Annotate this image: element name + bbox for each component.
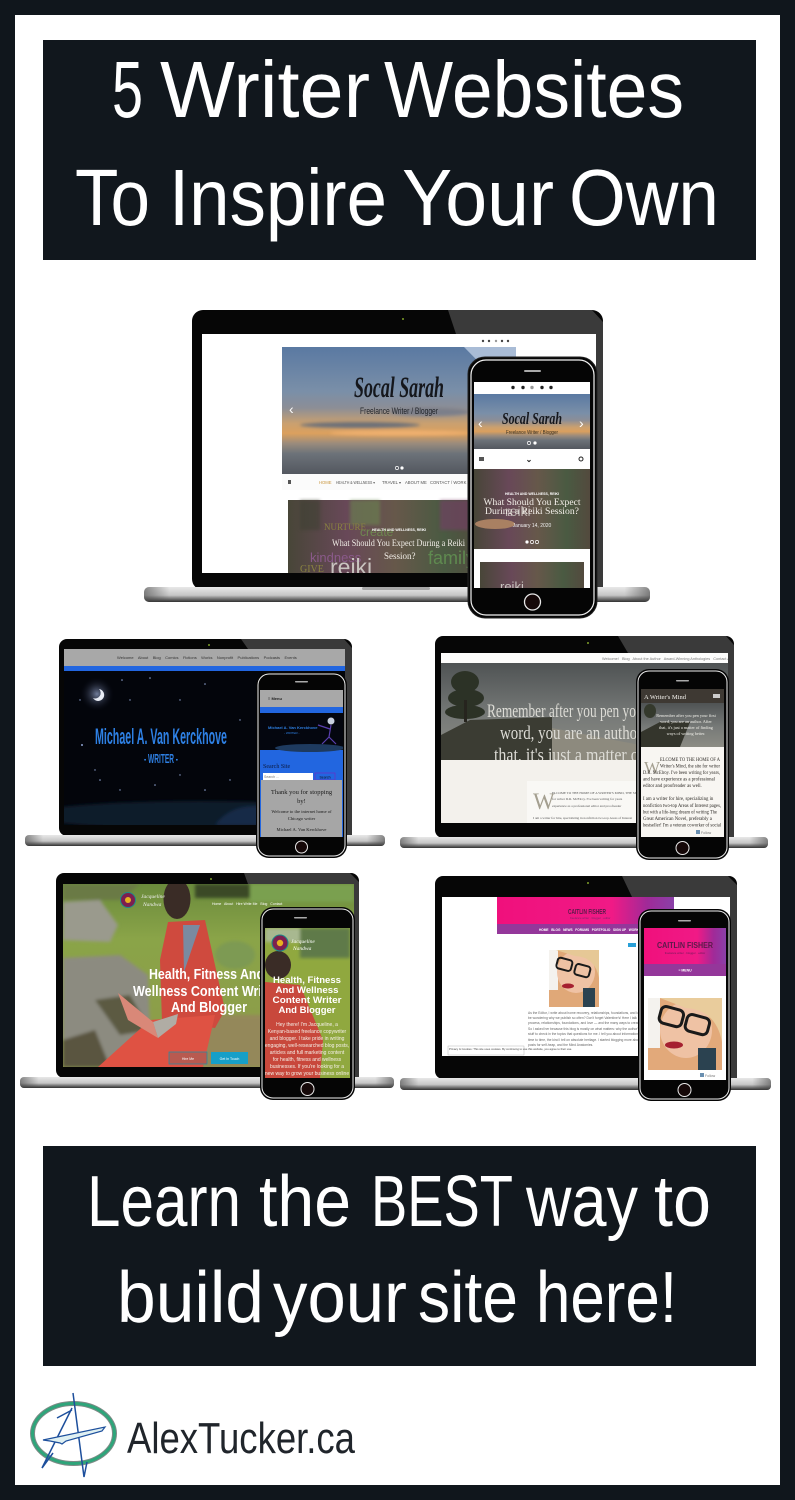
laptop: Socal Sarah: Session? — [384, 551, 416, 561]
phone: A Writer's Mind: I am a writer for hire, specializing in — [643, 797, 714, 802]
laptop: Socal Sarah: HEALTH AND WELLNESS, REIKI — [372, 528, 426, 532]
laptop: Health, Fitness and Wellness: Get In Touch — [220, 1057, 239, 1061]
title banner: Writer — [160, 45, 370, 134]
laptop: Caitlin Fisher: As the Editor, I write about home recovery, relationships, foundations, and love. You may — [528, 1011, 657, 1015]
phone: Health, Fitness and Wellness: And Blogger — [278, 1005, 336, 1015]
mockup: A Writer's Mind laptop and phone — [400, 636, 768, 860]
title banner: Websites — [384, 45, 684, 134]
phone: Socal Sarah: ‹ — [478, 415, 483, 431]
laptop: Socal Sarah — [144, 310, 650, 602]
laptop: Caitlin Fisher: be wondering why we publish so often? Don't forget Valentine's! Here I talk about recovery — [528, 1016, 660, 1020]
phone: Michael A. Van Kerckhove — [256, 672, 347, 858]
title banner — [43, 40, 756, 260]
call to action banner: BEST — [371, 1162, 513, 1242]
phone: Michael A. Van Kerckhove: Michael A. Van Kerckhove — [268, 725, 318, 730]
phone: Health, Fitness and Wellness: businesses. If you're looking for a — [270, 1064, 344, 1070]
phone: Socal Sarah: January 14, 2020 — [513, 523, 552, 529]
phone: A Writer's Mind: and have experience as a professional — [643, 778, 716, 782]
title banner: To — [75, 153, 150, 242]
phone: Michael A. Van Kerckhove: ≡ Menu — [268, 696, 282, 701]
call to action banner: your — [273, 1258, 407, 1338]
phone: A Writer's Mind: editor and proofreader as well. — [643, 784, 702, 789]
phone: Michael A. Van Kerckhove: Welcome to the internet home of — [271, 809, 332, 814]
laptop: Socal Sarah: Socal Sarah — [354, 371, 444, 404]
laptop: Socal Sarah: CONTACT / WORK WITH ME — [430, 480, 486, 485]
laptop: A Writer's Mind: W — [533, 789, 555, 814]
call to action banner: site — [418, 1258, 518, 1338]
laptop: Socal Sarah: kindness — [310, 550, 362, 565]
laptop: A Writer's Mind: ELCOME TO THE HOME OF A WRITER'S MIND, THE SITE — [552, 791, 640, 796]
phone: Socal Sarah: Socal Sarah — [502, 409, 562, 428]
laptop: Socal Sarah: HOME — [319, 480, 332, 485]
phone: Health, Fitness and Wellness: Nandwa — [292, 946, 312, 952]
call to action banner: to — [654, 1162, 711, 1242]
call to action banner: build — [117, 1258, 264, 1338]
laptop: A Writer's Mind: that, it's just a matter of — [494, 745, 645, 766]
laptop: Caitlin Fisher: Privacy & Cookies: This site uses cookies. By continuing to use this website, you agree to their use. — [449, 1047, 572, 1051]
phone: Michael A. Van Kerckhove: Thank you for stopping — [271, 789, 333, 796]
laptop: Health, Fitness and Wellness — [20, 873, 394, 1088]
phone: Michael A. Van Kerckhove: Search ... — [264, 775, 279, 779]
laptop: Caitlin Fisher: HOME BLOG NEWS FORUMS PORTFOLIO SIGN UP WORK WITH ME — [539, 928, 654, 932]
phone: A Writer's Mind: ways of writing better. — [667, 731, 705, 736]
phone: Socal Sarah: reiki — [500, 579, 524, 594]
phone: Health, Fitness and Wellness: Hey there! I'm Jacqueline, a — [276, 1022, 338, 1028]
phone: A Writer's Mind: D.R. McElroy. I've been writing for years, — [643, 771, 720, 776]
mockup: Socal Sarah laptop and phone — [144, 310, 650, 618]
phone: A Writer's Mind: that, it's just a matter of finding — [659, 725, 714, 731]
mockup: Michael A. Van Kerckhove laptop and phone — [25, 639, 385, 858]
laptop: Health, Fitness and Wellness: And Blogger — [171, 1000, 247, 1016]
laptop: Michael A. Van Kerckhove: Welcome About Blog Comics Fictions Works Nonprofit Publications Podcasts Events — [117, 655, 297, 660]
laptop: Socal Sarah: NURTURE — [324, 522, 366, 532]
laptop: Caitlin Fisher: stuff to check in the topics that questions for me. I tell you about information from — [528, 1032, 646, 1036]
phone: Socal Sarah: HEALTH AND WELLNESS, REIKI — [505, 492, 559, 496]
laptop: A Writer's Mind: I am a writer for hire, specializing in nonfiction two-top Areas of Interest — [533, 816, 632, 821]
phone: A Writer's Mind: bestseller! I'm a veteran coworker of social — [643, 824, 722, 828]
laptop: A Writer's Mind — [400, 636, 768, 848]
laptop: Health, Fitness and Wellness: Wellness Content Writer — [133, 984, 278, 1000]
laptop: Health, Fitness and Wellness: Health, Fitness And — [149, 967, 264, 983]
phone: A Writer's Mind: Writer's Mind, the site for writer — [660, 764, 720, 770]
laptop: A Writer's Mind: word, you are an author. — [500, 723, 645, 744]
logo wordmark: AlexTucker.ca — [127, 1414, 355, 1463]
phone: Caitlin Fisher: Follow — [705, 1074, 716, 1078]
title banner: Your — [402, 153, 554, 242]
phone: Health, Fitness and Wellness: engaging, well-researched blog posts, — [265, 1043, 349, 1049]
phone: Health, Fitness and Wellness: articles and full marketing content — [270, 1050, 345, 1056]
phone: Health, Fitness and Wellness: new way to grow your business online — [265, 1071, 349, 1077]
phone: A Writer's Mind: ELCOME TO THE HOME OF A — [660, 758, 720, 763]
phone: Michael A. Van Kerckhove: Michael A. Van Kerckhove — [277, 827, 326, 832]
phone: A Writer's Mind — [636, 669, 729, 860]
laptop: Health, Fitness and Wellness: Jacqueline — [141, 894, 165, 900]
title banner: 5 — [112, 45, 143, 134]
laptop: Health, Fitness and Wellness: Home About Hire Write Me Blog Contact — [212, 902, 282, 906]
phone: Socal Sarah: What Should You Expect — [484, 497, 581, 507]
laptop: Health, Fitness and Wellness: Nandwa — [142, 902, 162, 908]
laptop: Caitlin Fisher: time to time, the kind I tell on absolute heritage. I started blogging more about self-care — [528, 1038, 655, 1042]
laptop: Health, Fitness and Wellness: Hire Me — [182, 1057, 194, 1061]
laptop: Caitlin Fisher: posts for self-heap, and the Mind Anatomies. — [528, 1043, 593, 1047]
phone: A Writer's Mind: word, you are an author. After — [660, 719, 712, 725]
laptop: A Writer's Mind: Welcome! Blog About the Author Award-Winning Anthologies Contact Author ⌕ — [602, 657, 744, 661]
phone: A Writer's Mind: Remember after you pen your first — [656, 713, 717, 718]
title banner: Own — [569, 153, 719, 242]
phone: Socal Sarah: During a Reiki Session? — [485, 506, 579, 516]
phone: Michael A. Van Kerckhove: by! — [297, 798, 306, 805]
phone: A Writer's Mind: Follow — [701, 831, 712, 835]
title banner: Inspire — [169, 153, 387, 242]
phone: Caitlin Fisher: ≡ MENU — [678, 968, 692, 972]
phone: Health, Fitness and Wellness: Kenyan-based freelance copywriter — [268, 1029, 347, 1035]
phone: A Writer's Mind: Great American Novel, preferably a — [643, 817, 713, 822]
phone: Caitlin Fisher — [638, 909, 731, 1101]
phone: Socal Sarah: › — [579, 415, 584, 431]
logo icon — [32, 1393, 114, 1477]
phone: Health, Fitness and Wellness: and blogger. I take pride in writing — [270, 1036, 345, 1042]
laptop: A Writer's Mind: experience as a professional editor and proofreader — [552, 804, 622, 808]
phone: Health, Fitness and Wellness: for health, fitness and wellness — [273, 1057, 342, 1063]
call to action banner: Learn — [87, 1162, 241, 1242]
laptop: Socal Sarah: ‹ — [289, 401, 294, 417]
phone: Health, Fitness and Wellness: Health, Fitness — [273, 975, 341, 985]
laptop: Caitlin Fisher: process, relationships, foundations, and love — and the many ways to create this love. — [528, 1021, 654, 1025]
laptop: Socal Sarah: What Should You Expect During a Reiki — [332, 538, 465, 548]
laptop: Socal Sarah: TRAVEL ▾ — [382, 480, 401, 485]
phone: Caitlin Fisher: CAITLIN FISHER — [657, 941, 713, 950]
laptop: Caitlin Fisher: CAITLIN FISHER — [568, 909, 606, 916]
laptop: Caitlin Fisher — [400, 876, 771, 1090]
phone: Caitlin Fisher: freelance writer · blogger · editor — [665, 951, 705, 955]
laptop: A Writer's Mind: Remember after you pen your — [487, 701, 647, 722]
phone: Socal Sarah — [468, 357, 597, 618]
laptop: Michael A. Van Kerckhove — [25, 639, 385, 846]
phone: Socal Sarah: Freelance Writer / Blogger — [506, 430, 558, 436]
phone: Michael A. Van Kerckhove: Search Site — [263, 764, 290, 770]
phone: Michael A. Van Kerckhove: - WRITER - — [284, 731, 300, 735]
laptop: Socal Sarah: ABOUT ME — [405, 480, 427, 485]
call to action banner: way — [525, 1162, 638, 1242]
mockup: Caitlin Fisher laptop and phone — [400, 876, 771, 1101]
phone: Health, Fitness and Wellness — [260, 907, 355, 1100]
phone: A Writer's Mind: but with a life-long dream of writing The — [643, 810, 717, 816]
laptop: Michael A. Van Kerckhove: Michael A. Van Kerckhove — [95, 724, 227, 749]
mockup: Health, Fitness and Wellness laptop and phone — [20, 873, 394, 1100]
phone: Michael A. Van Kerckhove: Chicago writer — [288, 816, 316, 821]
call to action banner: the — [259, 1162, 351, 1242]
phone: A Writer's Mind: W — [644, 758, 661, 777]
phone: A Writer's Mind: nonfiction two-top Areas of Interest pages, — [643, 804, 721, 809]
laptop: Caitlin Fisher: freelance writer · blogger · editor — [570, 916, 610, 920]
phone: A Writer's Mind: A Writer's Mind — [644, 694, 687, 701]
call to action banner — [43, 1146, 756, 1366]
laptop: Socal Sarah: family — [428, 548, 475, 568]
laptop: A Writer's Mind: for writer D.R. McElroy. I've been writing for years — [552, 797, 623, 801]
phone: Socal Sarah: reiki — [505, 503, 531, 519]
phone: Socal Sarah: ⌄ — [526, 455, 532, 464]
call to action banner: here! — [536, 1258, 677, 1338]
laptop: Socal Sarah: Freelance Writer / Blogger — [360, 406, 438, 417]
laptop: Socal Sarah: GIVE — [300, 564, 324, 575]
phone: Health, Fitness and Wellness: And Wellness — [276, 985, 338, 995]
laptop: Socal Sarah: HEALTH & WELLNESS ▾ — [336, 480, 375, 485]
laptop: Socal Sarah: reiki — [330, 554, 372, 580]
laptop: Michael A. Van Kerckhove: - WRITER - — [144, 751, 178, 766]
laptop: Socal Sarah: create — [360, 525, 394, 539]
phone: Michael A. Van Kerckhove: Search — [319, 776, 331, 780]
phone: Health, Fitness and Wellness: Content Writer — [272, 995, 342, 1005]
laptop: Caitlin Fisher: So I asked her because this blog is mostly on what matters: why the author's grit of it all will — [528, 1027, 661, 1031]
phone: Health, Fitness and Wellness: Jacqueline — [291, 939, 315, 945]
